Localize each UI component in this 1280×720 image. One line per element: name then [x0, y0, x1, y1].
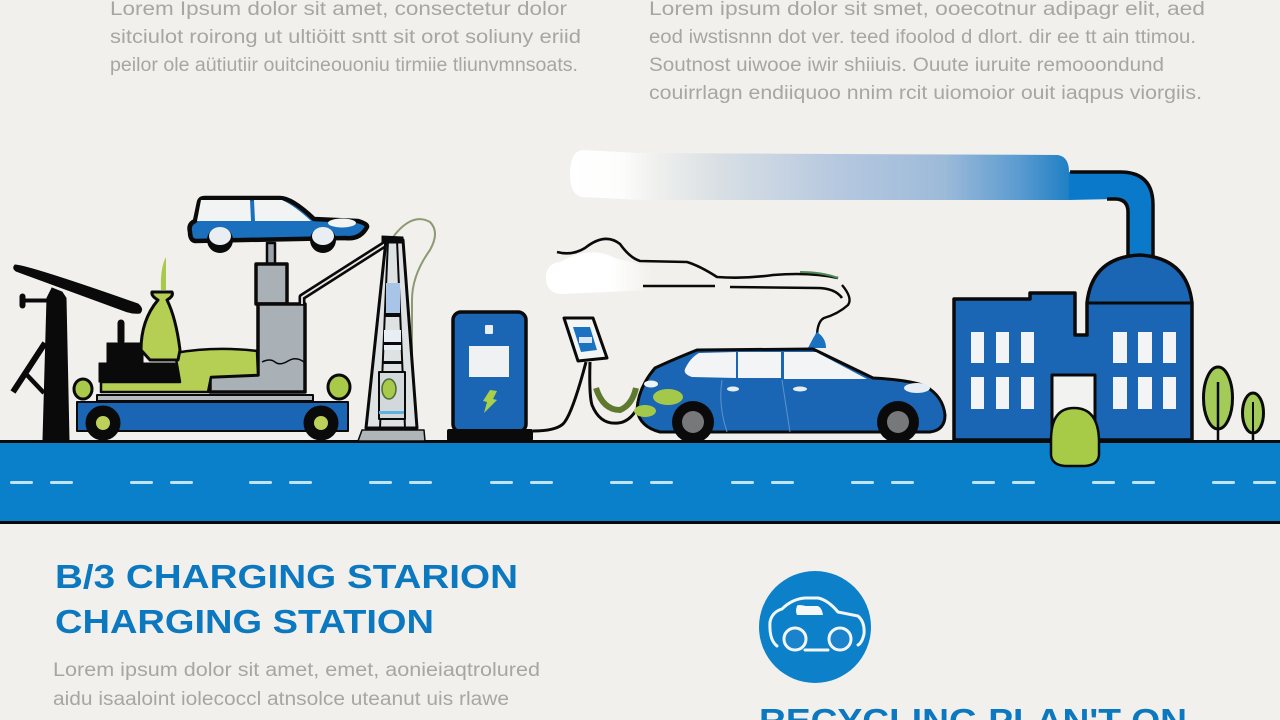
- text block: top right paragraph: Soutnost uiwooe iwir shiiuis. Ouute iuruite remooondund: [649, 55, 1164, 76]
- wheels: [86, 406, 338, 440]
- door: [1052, 375, 1095, 440]
- green tray: [101, 349, 258, 392]
- arm: [302, 239, 393, 304]
- windows: [971, 332, 1176, 409]
- smoke band from chimney: [570, 150, 1069, 200]
- icon: charging cable and sign: [533, 318, 638, 431]
- text block: top left paragraph: [110, 0, 581, 76]
- icon: car in blue circle: [759, 571, 871, 683]
- text block: bottom left paragraph: [53, 660, 540, 720]
- icon: blue electric car: [634, 349, 945, 443]
- icon: lifted car: [190, 198, 367, 265]
- green splotches: [653, 389, 683, 405]
- text block: top right paragraph: couirrlagn endiiquoo nnim rcit uiomoior ouit iaqpus viorgiis.: [649, 83, 1202, 104]
- building body: [954, 255, 1192, 440]
- icon: tower with cable: [358, 219, 435, 441]
- heading: charging station: CHARGING STATION: [55, 603, 434, 640]
- heading: charging station: B/3 CHARGING STARION: [55, 558, 518, 595]
- car lights and handles: [904, 383, 930, 393]
- text block: bottom left paragraph: aidu isaaloint iolecoccl atnsolce uteanut uis rlawe: [53, 689, 509, 710]
- car windows: [685, 352, 736, 378]
- green side discs: [74, 375, 350, 399]
- text block: top right paragraph: eod iwstisnnn dot ver. teed ifoolod d dlort. dir ee tt ain ttimou.: [649, 27, 1196, 48]
- black block: [99, 320, 180, 382]
- text block: top left paragraph: sitciulot roirong ut ultiöitt sntt sit orot soliuny eriid: [110, 27, 581, 48]
- trailer bed: [77, 402, 348, 431]
- icon: recycling plant: [954, 172, 1192, 466]
- text block: top left paragraph: peilor ole aütiutiir ouitcineouoniu tirmiie tliunvmnsoats.: [110, 55, 578, 76]
- green vase: [141, 292, 180, 360]
- text block: top right paragraph: [649, 0, 1205, 104]
- text block: bottom left paragraph: Lorem ipsum dolor sit amet, emet, aonieiaqtrolured: [53, 660, 540, 681]
- machine housing: [210, 264, 305, 392]
- road: [0, 440, 1280, 524]
- chimney pipe: [1069, 172, 1153, 258]
- icon: charging station: [447, 312, 533, 441]
- smoke cloud and wisps: [546, 239, 850, 348]
- heading: charging station: [55, 558, 518, 640]
- icon: recycling machine on trailer: [74, 239, 393, 440]
- green bush: [1051, 408, 1099, 466]
- car wheels: [672, 401, 714, 443]
- icon: solar panel on pole: [13, 265, 142, 440]
- icon: trees: [1204, 367, 1264, 440]
